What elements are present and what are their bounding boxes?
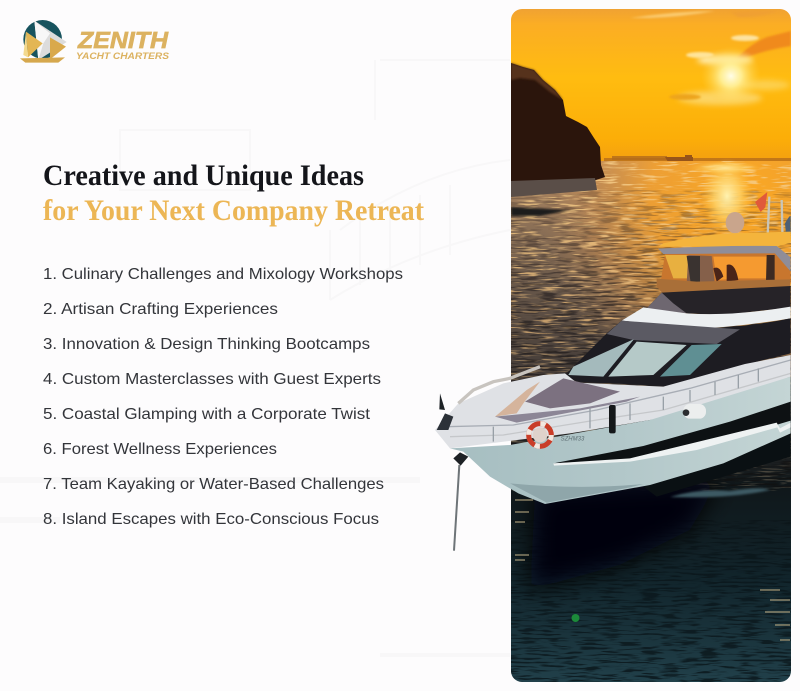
logo: Zenith Yacht Charters (20, 20, 170, 63)
hull black stripe (553, 402, 791, 463)
clouds (630, 10, 791, 105)
title line 1: Creative and Unique Ideas (43, 159, 364, 192)
hull shadow (643, 433, 791, 497)
water ripple texture (511, 161, 791, 491)
water (511, 161, 791, 682)
water glints (515, 490, 790, 640)
foredeck (435, 355, 791, 448)
bow rail (458, 367, 540, 403)
life ring (529, 424, 551, 446)
flag and masts (703, 192, 791, 245)
faint ghost yacht watermark (0, 60, 510, 655)
flybridge lower deck (657, 279, 790, 294)
hull (450, 377, 791, 504)
anchor chain (454, 465, 459, 551)
boat name: SZHM33 (561, 437, 585, 443)
logo icon (20, 20, 67, 63)
title (43, 159, 424, 227)
list of retreat ideas: 8. Island Escapes with Eco-Conscious Focus (43, 511, 379, 528)
list of retreat ideas: 6. Forest Wellness Experiences (43, 441, 277, 458)
logo tagline: YACHT CHARTERS (76, 51, 170, 62)
list of retreat ideas: 7. Team Kayaking or Water-Based Challenges (43, 476, 384, 493)
flybridge cabin glass (660, 253, 791, 287)
list of retreat ideas: 3. Innovation & Design Thinking Bootcamps (43, 336, 370, 353)
list of retreat ideas: 2. Artisan Crafting Experiences (43, 301, 278, 318)
yacht (435, 192, 791, 551)
list of retreat ideas: 5. Coastal Glamping with a Corporate Twist (43, 406, 371, 423)
hull white line (553, 423, 791, 466)
list of retreat ideas: 1. Culinary Challenges and Mixology Workshops (43, 266, 403, 283)
logo wordmark: ZENITH (77, 27, 169, 53)
island (511, 63, 605, 216)
sun (704, 50, 758, 96)
flybridge roof (658, 232, 791, 247)
white deckhouse band (622, 307, 791, 328)
black fender on rail (609, 405, 616, 433)
list of retreat ideas (43, 266, 403, 528)
fender (683, 404, 706, 419)
list of retreat ideas: 4. Custom Masterclasses with Guest Experts (43, 371, 381, 388)
anchor and equipment at bow (437, 413, 453, 430)
sky (511, 9, 791, 161)
photo panel: sunset sea (511, 9, 791, 682)
green lens flare (572, 614, 580, 622)
lower water texture (511, 520, 791, 682)
yacht shadow on water (530, 480, 720, 590)
dark windows block (565, 318, 791, 387)
sun reflection (704, 170, 750, 231)
title line 2: for Your Next Company Retreat (43, 194, 424, 227)
distant shoreline and ship (604, 155, 791, 161)
